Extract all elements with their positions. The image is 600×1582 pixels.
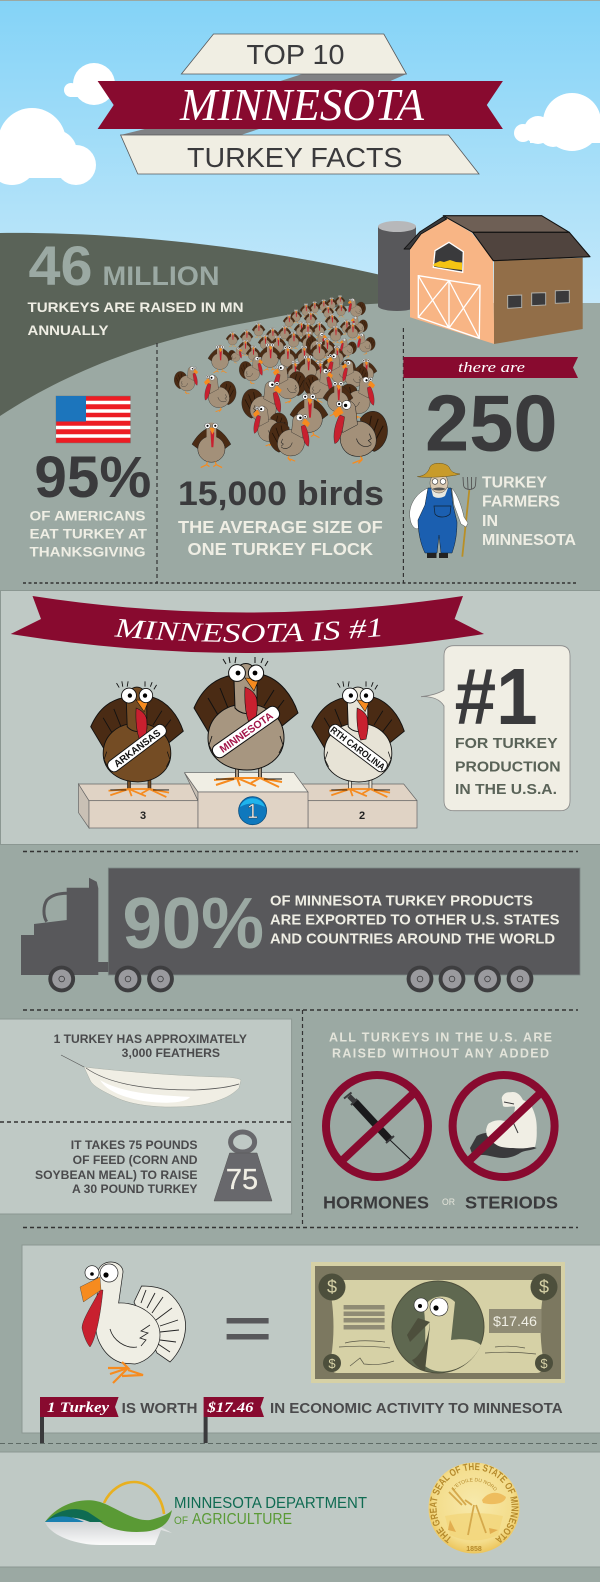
side windows [508,290,569,308]
caption: OF AMERICANS [30,508,146,524]
flag: 1 turkey: 1 Turkey [47,1400,109,1416]
banner: MINNESOTA IS #1 [114,618,380,642]
icon: dollar bill: $ [327,1277,337,1297]
icon: farmer [410,463,476,558]
loft window [433,242,463,272]
turkey flock [174,295,387,468]
logo mark [45,1482,172,1545]
fact: 95% [30,396,151,560]
panel: feathers and feed [0,1019,292,1214]
vertical divider [302,1010,304,1227]
label: or: OR [442,1197,455,1207]
text: feathers [54,1032,247,1060]
icon: weight [214,1132,272,1201]
section dividers [23,328,578,583]
callout: PRODUCTION [455,759,561,776]
icon: prohibition left [326,1075,428,1177]
text: economic activity: IN ECONOMIC ACTIVITY TO MINNESOTA [270,1401,563,1417]
caption: TURKEY [482,475,547,492]
text: OF MINNESOTA TURKEY PRODUCTS [270,893,533,910]
flag: $17.46 [204,1397,264,1443]
stat: 90%: 90% [122,884,264,964]
icon: prohibition right [453,1075,555,1177]
logo: minnesota department of agriculture: OF [174,1515,188,1527]
text: ARE EXPORTED TO OTHER U.S. STATES [270,912,560,929]
barn door [418,276,480,338]
ribbon: minnesota: MINNESOTA [179,79,425,130]
panel: no hormones or steroids [323,1031,558,1213]
fact: 15,000 birds: ONE TURKEY FLOCK [188,539,373,559]
hill [0,233,385,430]
callout [421,646,570,811]
ribbon: top 10 [181,34,406,81]
stat: 250 [425,379,558,468]
equals sign [227,1318,269,1340]
heading: ALL TURKEYS IN THE U.S. ARE [329,1031,552,1045]
caption [482,475,576,549]
icon: us flag [56,396,130,443]
label: steroids: STERIODS [465,1193,558,1213]
turkey: arkansas [91,681,183,797]
panel: footer [0,1452,600,1568]
ribbon: minnesota [98,79,503,130]
text: is worth: IS WORTH [122,1401,198,1417]
fact: 46 million: 46 [28,234,92,297]
title ribbons [98,34,503,174]
fact: 46 million: MILLION [102,261,220,291]
stat: 95% [34,445,151,510]
caption: FARMERS [482,494,560,511]
text: feed: SOYBEAN MEAL) TO RAISE [35,1168,198,1182]
turkey: minnesota [194,657,298,787]
logo: minnesota department of agriculture [45,1482,367,1545]
podium [78,773,417,828]
label: hormones: HORMONES [323,1193,429,1213]
text: feed [35,1138,198,1196]
truck [21,868,580,992]
state seal: L'ETOILE DU NORD [452,1478,497,1490]
text: feed: A 30 POUND TURKEY [72,1182,198,1196]
text: feathers: 3,000 FEATHERS [122,1046,220,1060]
panel: economic value [22,1245,600,1443]
fact: 46 million: ANNUALLY [28,322,109,338]
text: feathers: 1 TURKEY HAS APPROXIMATELY [54,1032,247,1046]
medal [239,797,267,825]
trailer [108,868,580,975]
ribbon: turkey facts: TURKEY FACTS [187,142,402,173]
icon: dollar bill: $ [540,1356,548,1371]
podium number 2: 2 [359,810,365,822]
state seal: THE GREAT SEAL OF THE STATE OF MINNESOTA [430,1463,518,1544]
ribbon: top 10: TOP 10 [246,39,344,70]
callout: FOR TURKEY [455,735,558,752]
heading: RAISED WITHOUT ANY ADDED [332,1047,549,1061]
flag: $17.46: $17.46 [206,1400,254,1416]
fact: 15,000 birds [178,475,384,559]
text: feed: OF FEED (CORN AND [73,1153,198,1167]
caption [30,508,147,560]
banner: there are [403,357,578,378]
barn side [494,258,583,344]
podium number 3: 3 [140,810,146,822]
fact: 46 million [28,234,244,338]
icon: dollar bill: $ [328,1356,336,1371]
silo [378,221,416,311]
wheels [48,966,533,992]
sky [0,1,600,311]
caption: EAT TURKEY AT [30,526,147,542]
ground [0,303,600,590]
banner [10,596,484,653]
icon: feather [61,1055,241,1107]
state seal: 1858 [466,1546,482,1553]
barn roof [404,216,590,261]
caption: THANKSGIVING [30,544,146,560]
turkey: arkansas: ARKANSAS [112,728,163,770]
flag: 1 turkey [40,1397,119,1443]
icon: dollar bill [311,1262,565,1383]
logo text: MINNESOTA DEPARTMENT [174,1495,367,1512]
section dividers [23,852,578,1228]
fact: 250 farmers [403,357,578,558]
text [270,893,560,948]
heading [329,1031,552,1061]
thin divider [0,1442,600,1444]
fact: 15,000 birds: THE AVERAGE SIZE OF [178,517,383,537]
panel: minnesota is #1 [0,590,600,845]
text: feed: IT TAKES 75 POUNDS [71,1138,198,1152]
cab [21,878,108,975]
callout: #1 [455,652,538,741]
clouds [0,63,600,185]
icon: weight: 75 [226,1164,258,1196]
banner: there are: there are [458,360,525,376]
caption: IN [482,513,498,530]
icon: syringe [344,1092,411,1160]
medal: 1 [247,801,258,823]
barn front [410,218,494,344]
icon: flexed arm [470,1092,537,1158]
logo: minnesota department of agriculture: AGRICULTURE [192,1511,292,1528]
ribbon: turkey facts [121,129,479,174]
caption: MINNESOTA [482,532,576,549]
icon: white turkey [80,1262,186,1383]
turkey: north carolina: RTH CAROLINA [328,725,387,772]
icon: dollar bill: $ [539,1277,549,1297]
text: AND COUNTRIES AROUND THE WORLD [270,931,555,948]
turkey: minnesota: MINNESOTA [218,710,276,756]
turkey: north carolina [312,681,404,797]
fact: 46 million: TURKEYS ARE RAISED IN MN [28,299,244,315]
callout: IN THE U.S.A. [455,781,557,798]
icon: dollar bill: $17.46 [493,1313,537,1329]
barn [404,216,590,344]
fact: 15,000 birds: 15,000 birds [178,475,384,513]
